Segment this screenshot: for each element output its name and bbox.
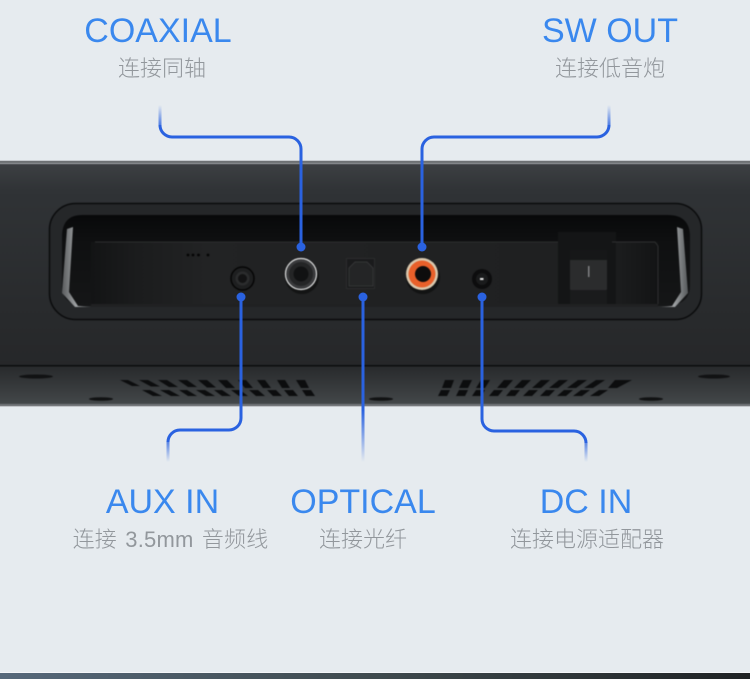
label: AUX IN: 连接 3.5mm 音频线 (73, 527, 268, 552)
label: SW OUT: 连接低音炮 (555, 56, 665, 81)
four dots (187, 254, 209, 256)
label: SW OUT: SW OUT (542, 12, 678, 50)
label: SW OUT (542, 12, 678, 81)
label: DC IN: 连接电源适配器 (510, 527, 664, 552)
leader line: OPTICAL (358, 292, 368, 462)
label: OPTICAL: 连接光纤 (319, 527, 407, 552)
label: COAXIAL: COAXIAL (84, 12, 232, 50)
DC IN port (472, 269, 492, 289)
left vent grille (120, 380, 315, 396)
mounting feet (19, 374, 730, 401)
COAXIAL port (285, 258, 319, 294)
connector recess (50, 204, 702, 320)
leader line: AUX IN (168, 292, 246, 462)
label: OPTICAL: OPTICAL (290, 483, 436, 521)
leader line: COAXIAL (160, 105, 306, 252)
right vent grille (438, 380, 632, 396)
AUX IN port (231, 267, 254, 290)
label: COAXIAL (84, 12, 232, 81)
label: AUX IN: AUX IN (106, 483, 219, 521)
leader line: SW OUT (418, 105, 609, 252)
SW OUT port (406, 258, 440, 294)
soundbar body (0, 161, 750, 406)
leader line: DC IN (478, 292, 586, 462)
label: AUX IN (73, 483, 268, 552)
label: COAXIAL: 连接同轴 (118, 56, 206, 81)
next section edge (0, 672, 750, 679)
OPTICAL port (346, 258, 374, 288)
label: DC IN (510, 483, 664, 552)
label: OPTICAL (290, 483, 436, 552)
label: DC IN: DC IN (540, 483, 632, 521)
